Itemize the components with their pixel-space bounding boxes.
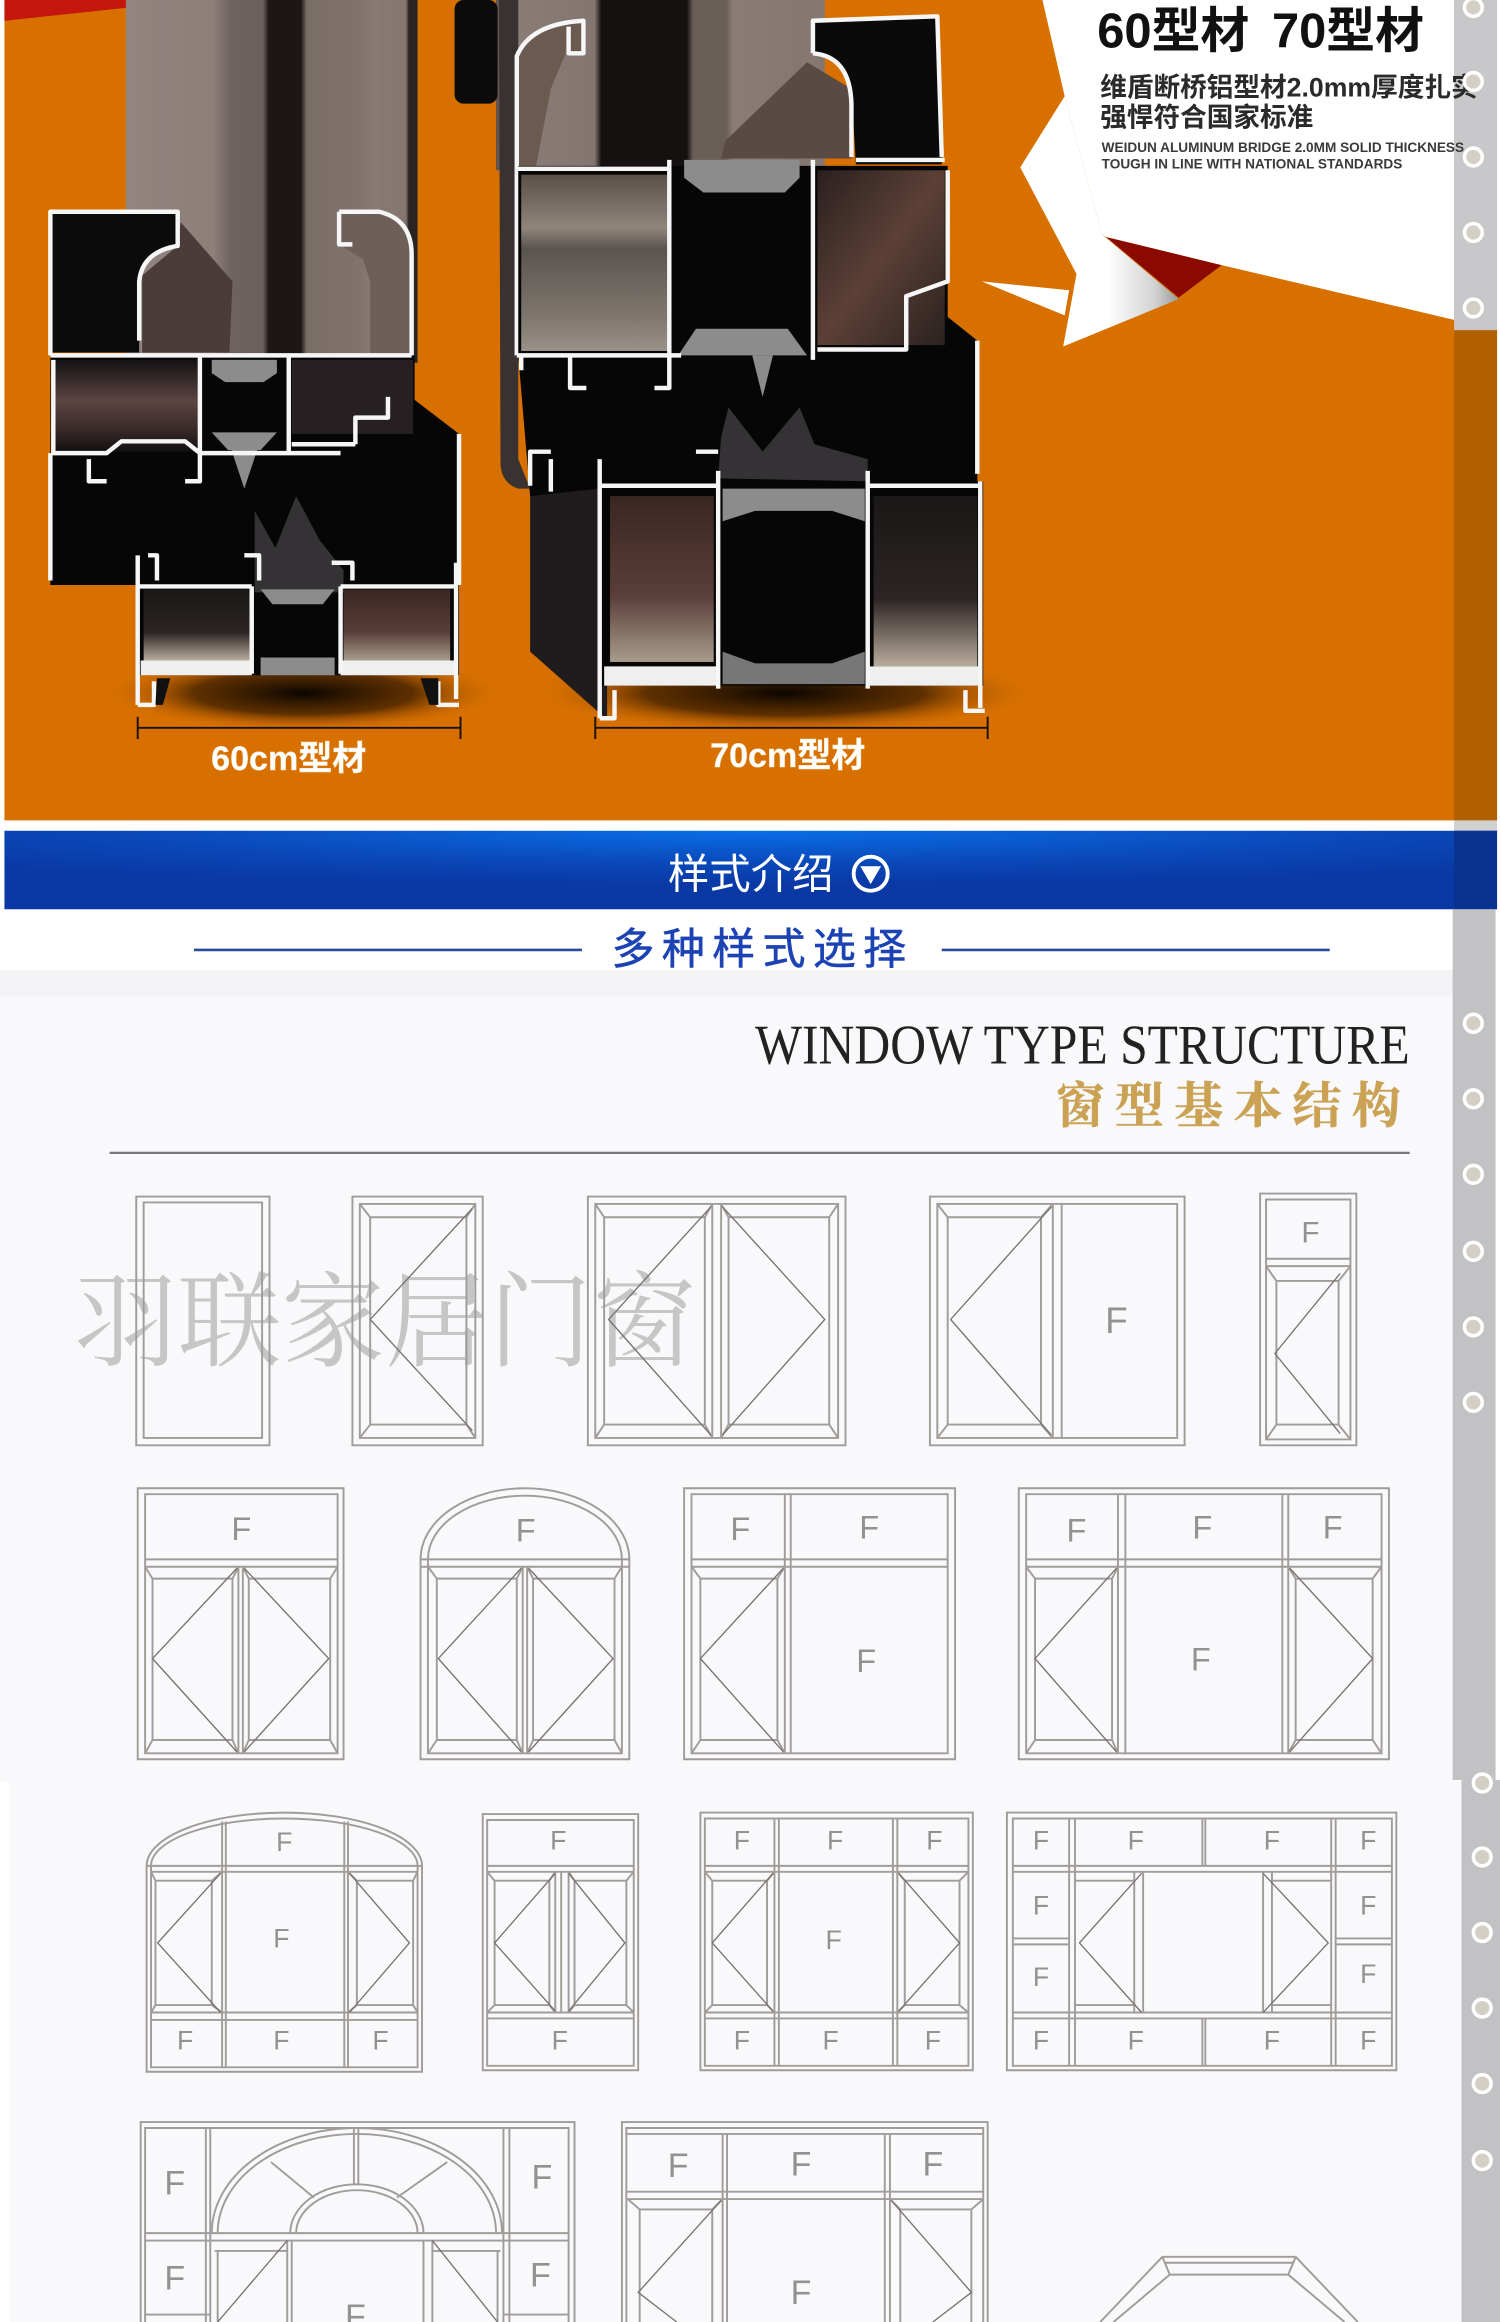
window: single casement [352, 1197, 483, 1445]
window: triple row with two casements [700, 1813, 973, 2070]
dimension line: 60cm [138, 717, 461, 739]
window: triple row with two casements: F [823, 2026, 839, 2056]
window: wide multi-light with two casements: F [1033, 1826, 1049, 1856]
window: triple row with two casements: F [926, 1826, 942, 1856]
window: double casement [588, 1197, 846, 1445]
binding strip: lower with punch holes [1462, 1774, 1500, 2322]
window: wide multi-light with two casements: F [1033, 1962, 1049, 1992]
icon: circled down triangle [854, 857, 888, 891]
window: arched fanlight composition: F [164, 2165, 185, 2203]
window: triple row with two casements: F [734, 1826, 750, 1856]
window: wide multi-light with two casements [1007, 1813, 1396, 2070]
subheading with rules: 多种样式选择 [612, 926, 914, 974]
window: arched top with side casements: F [276, 1827, 292, 1857]
watermark: 羽联家居门窗 [74, 1267, 696, 1381]
window: double casement with top and bottom lights [483, 1814, 638, 2070]
callout English description: WEIDUN ALUMINUM BRIDGE 2.0MM SOLID THICKNESS [1102, 140, 1464, 155]
window: arched fanlight composition: F [530, 2256, 551, 2294]
window: triple row with two casements: F [925, 2026, 941, 2056]
window: three top lights with two casements: F [668, 2147, 689, 2185]
window: double casement with top light [138, 1488, 344, 1759]
window: casement plus three fixed lights: F [856, 1643, 876, 1679]
window: arched top with side casements: F [372, 2026, 389, 2056]
window: arched double casement [421, 1488, 629, 1759]
window: double casement with top light: F [231, 1511, 251, 1547]
window: two casements flanking fixed light: F [1067, 1513, 1086, 1549]
label: 70cm profile: 70cm型材 [710, 737, 865, 775]
window: wide multi-light with two casements: F [1033, 2026, 1049, 2056]
window: triple row with two casements: F [734, 2026, 750, 2056]
window: narrow casement with top light [1260, 1194, 1356, 1445]
window: two casements flanking fixed light: F [1323, 1510, 1343, 1546]
window: wide multi-light with two casements: F [1264, 2026, 1280, 2056]
diagram: 60 aluminium profile cross-section [50, 0, 459, 705]
window: three top lights with two casements: F [922, 2145, 943, 2183]
callout: torn paper with profile description [982, 0, 1478, 347]
window: wide multi-light with two casements: F [1033, 1891, 1049, 1921]
window: double casement with top and bottom lights: F [550, 1826, 566, 1856]
dimension line: 70cm [595, 717, 988, 739]
window: two casements flanking fixed light: F [1192, 1510, 1212, 1546]
window: narrow casement with top light: F [1301, 1216, 1320, 1249]
window: casement plus three fixed lights: F [730, 1511, 750, 1547]
window: wide multi-light with two casements: F [1360, 1891, 1376, 1921]
window: triple row with two casements: F [826, 1925, 842, 1955]
window: wide multi-light with two casements: F [1264, 1826, 1280, 1856]
label: 60cm profile: 60cm型材 [211, 740, 366, 778]
window: two casements flanking fixed light: F [1191, 1641, 1211, 1677]
title: Chinese: 窗型基本结构 [1056, 1078, 1411, 1133]
binding strip: middle with punch holes [1453, 909, 1496, 1780]
window: three top lights with two casements: F [791, 2274, 811, 2312]
banner title: 样式介绍 [668, 851, 834, 898]
window: casement plus fixed [930, 1197, 1185, 1445]
window: arched top with side casements: F [177, 2026, 193, 2056]
window: arched fanlight composition: F [164, 2259, 185, 2297]
window: arched top with side casements: F [273, 2026, 289, 2056]
window: three top lights with two casements [622, 2122, 988, 2322]
window: wide multi-light with two casements: F [1128, 2026, 1144, 2056]
window: casement plus three fixed lights [684, 1488, 955, 1759]
window: three top lights with two casements: F [791, 2145, 811, 2183]
callout Chinese description: 强悍符合国家标准 [1100, 103, 1313, 133]
window: casement plus three fixed lights: F [859, 1510, 879, 1546]
window: arched fanlight composition: F [532, 2159, 552, 2197]
window: arched fanlight composition [141, 2122, 575, 2322]
window: arched top with side casements: F [273, 1923, 289, 1953]
window: bay window outline [1100, 2257, 1358, 2322]
window: arched double casement: F [516, 1513, 536, 1549]
diagram: 70 aluminium profile cross-section [455, 0, 985, 720]
window: wide multi-light with two casements: F [1128, 1826, 1144, 1856]
header rule [110, 1152, 1410, 1154]
callout heading: 60型材 [1097, 4, 1249, 58]
window: wide multi-light with two casements: F [1360, 1826, 1376, 1856]
window: two casements flanking fixed light [1019, 1488, 1389, 1759]
panel: orange profile section [4, 0, 1497, 820]
window: wide multi-light with two casements: F [1360, 2026, 1376, 2056]
window: triple row with two casements: F [827, 1826, 843, 1856]
title: English: WINDOW TYPE STRUCTURE [755, 1014, 1410, 1076]
callout heading: 70型材 [1272, 4, 1424, 58]
window: fixed single [136, 1197, 269, 1445]
panel: window type catalogue page [0, 970, 1463, 2322]
red corner ribbon [4, 0, 200, 21]
floor shadows under profiles [104, 653, 1037, 733]
banner: style introduction [4, 831, 1497, 909]
window: wide multi-light with two casements: F [1360, 1959, 1376, 1989]
window: double casement with top and bottom lights: F [552, 2026, 568, 2056]
window: casement plus fixed: F [1105, 1299, 1128, 1341]
callout English description: TOUGH IN LINE WITH NATIONAL STANDARDS [1102, 156, 1402, 171]
binding strip: upper [1454, 0, 1497, 831]
window: arched top with side casements [147, 1813, 422, 2072]
callout Chinese description: 维盾断桥铝型材2.0mm厚度扎实 [1100, 72, 1478, 102]
binding strip punch holes: upper [1464, 0, 1482, 317]
